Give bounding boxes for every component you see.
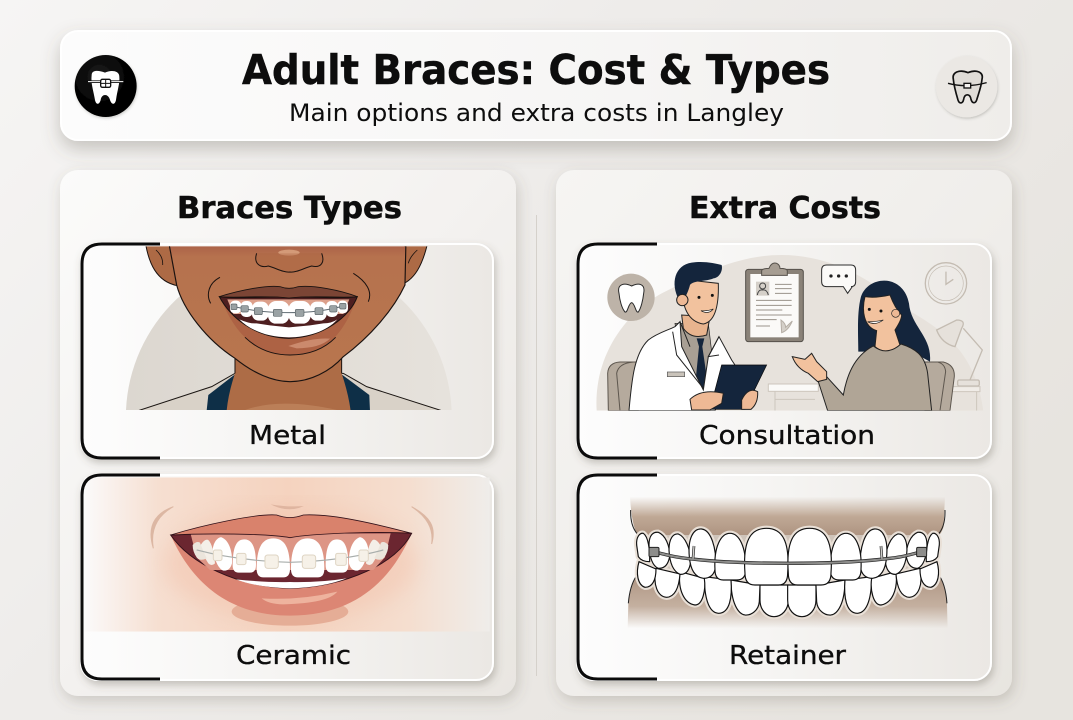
clock	[925, 263, 967, 304]
bracket accent: consultation card	[578, 244, 657, 458]
doctor	[629, 262, 767, 411]
chairs	[608, 362, 954, 411]
panel: extra costs	[556, 170, 1012, 696]
label: consultation: Consultation	[699, 421, 875, 451]
bracket accent: retainer card	[578, 475, 657, 679]
bracket accent: metal card	[82, 244, 160, 458]
panel: braces types	[60, 170, 516, 696]
label: metal: Metal	[249, 421, 326, 451]
label: retainer: Retainer	[729, 641, 846, 671]
desk lamp	[937, 320, 982, 386]
illustration: consultation scene	[596, 255, 983, 411]
heading: extra costs: Extra Costs	[689, 191, 881, 226]
card: metal	[81, 240, 493, 458]
heading: braces types: Braces Types	[177, 191, 402, 226]
illustration: ceramic braces smile	[85, 477, 490, 632]
illustration: retainer on teeth	[628, 497, 948, 628]
icon: black tooth badge	[75, 55, 137, 117]
speech bubble	[822, 265, 856, 293]
patient	[792, 281, 932, 411]
label: ceramic: Ceramic	[236, 641, 351, 671]
card: retainer	[577, 475, 991, 680]
title: Adult Braces: Cost & Types	[242, 46, 830, 94]
subtitle: Main options and extra costs in Langley	[289, 99, 784, 127]
card: consultation	[577, 244, 991, 458]
desk	[768, 384, 980, 411]
illustration: metal braces smile	[126, 240, 452, 411]
icon: outlined tooth badge	[936, 56, 997, 117]
clipboard	[746, 263, 803, 342]
icon: tooth in circle	[607, 274, 655, 321]
bracket accent: ceramic card	[82, 475, 160, 679]
card: ceramic	[81, 475, 493, 680]
header card	[61, 31, 1011, 140]
